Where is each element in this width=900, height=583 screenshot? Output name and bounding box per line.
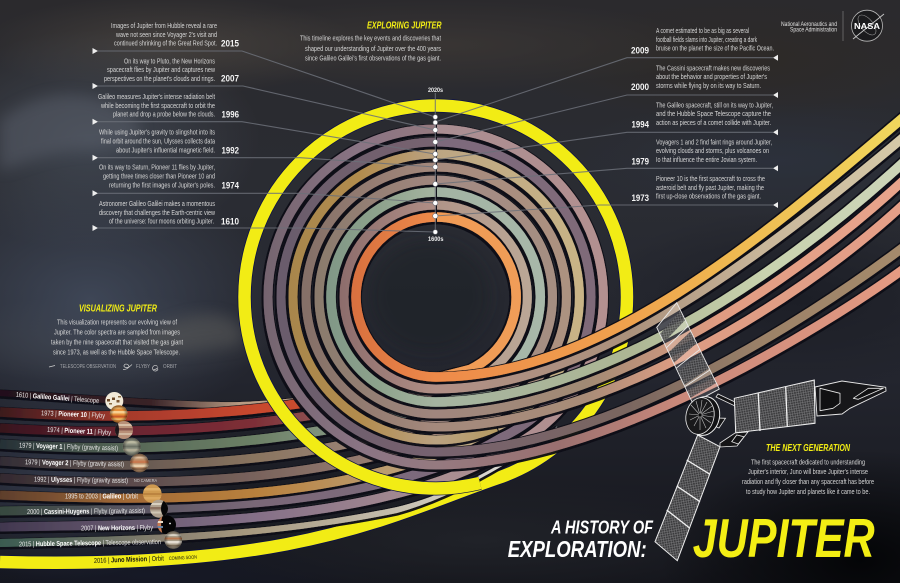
heading: Visualizing Jupiter: VISUALIZING JUPITER (79, 304, 158, 314)
arrowheads: left timeline markers (92, 48, 98, 231)
event 1973: asteroid belt and fly past Jupiter, making the (656, 183, 764, 192)
event 1973: 1973 (632, 193, 649, 204)
event 2007 (104, 56, 239, 84)
event 2000: The Cassini spacecraft makes new discoveries (656, 64, 770, 72)
intro text: Visualizing Jupiter: Jupiter. The color spectra are sampled from images (54, 327, 180, 336)
event 1992: While using Jupiter's gravity to slingshot into its (99, 128, 215, 136)
timeline connector lines (98, 51, 773, 233)
solar array: lower (655, 435, 720, 561)
event 1996: Galileo measures Jupiter's intense radiation belt (98, 92, 215, 101)
mission labels on the ribbons: 1979 | Voyager 1 | Flyby (gravity assist) (19, 443, 118, 452)
event 1994 (632, 100, 773, 130)
event 2015: 2015 (221, 38, 240, 50)
mission labels on the ribbons: 1973 | Pioneer 10 | Flyby (41, 410, 106, 420)
intro text: Exploring Jupiter (300, 34, 441, 62)
event 1996 (98, 92, 239, 120)
heading: Exploring Jupiter: EXPLORING JUPITER (367, 20, 442, 32)
event 1974: On its way to Saturn, Pioneer 11 flies by Jupiter, (99, 162, 215, 172)
mission labels on the ribbons: 2000 | Cassini-Huygens | Flyby (gravity assist) (27, 508, 145, 516)
divider next to logo (842, 11, 844, 41)
event 1974: 1974 (222, 180, 240, 192)
axis label: 2020s: 2020s (428, 88, 444, 94)
text: The Next Generation (742, 457, 874, 496)
intro text: Visualizing Jupiter (51, 317, 183, 356)
mission labels on the ribbons: 1992 | Ulysses | Flyby (gravity assist) (34, 477, 128, 485)
event 1610: discovery that challenges the Earth-centric view (99, 208, 215, 217)
event 1974: returning the first images of Jupiter's poles. (109, 180, 215, 190)
planet: Pioneer 10 view (109, 405, 129, 423)
event 1610: 1610 (221, 216, 239, 228)
mission labels on the ribbons: NO CAMERA (134, 478, 158, 484)
struts and instrument vault (712, 394, 748, 447)
mission labels on the ribbons (16, 392, 161, 548)
planet: Hubble view (164, 531, 184, 549)
event 2015: Images of Jupiter from Hubble reveal a rare (111, 21, 217, 30)
legend: observation types: FLYBY (136, 364, 150, 370)
event 1992: final orbit around the sun, Ulysses collects data (101, 136, 216, 146)
mission labels on the ribbons: 2015 | Hubble Space Telescope | Telescope observation (19, 539, 161, 548)
ribbons: ring left arcs and exit curves (upper layer) (244, 106, 900, 488)
planet: Voyager 1 view (122, 438, 141, 456)
ribbons: spacecraft tails and right-hand ring arcs (lower layer) (0, 106, 627, 563)
event 2009: football fields slams into Jupiter, creating a dark (656, 35, 757, 44)
event 2009: bruise on the planet the size of the Pacific Ocean. (656, 44, 774, 52)
mission labels on the ribbons: 2007 | New Horizons | Flyby (81, 525, 153, 532)
mission labels on the ribbons: 1610 | Galileo Galilei | Telescope (16, 392, 99, 405)
event 1992: about Jupiter's influential magnetic field. (116, 146, 215, 154)
icon: NASA logo: NASA (854, 21, 880, 31)
event 1610: Astronomer Galileo Galilei makes a momentous (99, 199, 215, 208)
event 1979: Voyagers 1 and 2 find faint rings around Jupiter, (656, 138, 772, 146)
event 1979 (632, 138, 772, 168)
mission label: Juno: COMING SOON (169, 555, 197, 562)
solar array: upper, semi-transparent (657, 303, 719, 403)
legend: observation types: ORBIT (163, 364, 177, 370)
event 1992 (99, 128, 239, 156)
heading: The Next Generation: THE NEXT GENERATION (766, 443, 851, 454)
solar array: right (734, 380, 815, 433)
title: A History of Exploration: Jupiter (508, 507, 875, 569)
event 2007: spacecraft flies by Jupiter and captures new (107, 65, 215, 74)
event 1610 (99, 199, 239, 228)
legend: observation types: TELESCOPE OBSERVATION (60, 364, 116, 370)
title: A History of Exploration: Jupiter: EXPLORATION: (508, 536, 647, 562)
event 2009 (631, 26, 774, 56)
event 1973: first up-close observations of the gas giant. (656, 192, 761, 200)
event 2000: 2000 (631, 82, 649, 93)
event 1979: evolving clouds and storms, plus volcanoes on (656, 146, 769, 155)
intro text: Exploring Jupiter: shaped our understanding of Jupiter over the 400 years (305, 44, 441, 53)
event 1996: while becoming the first spacecraft to orbit the (100, 101, 215, 110)
NASA organisation name (781, 22, 837, 34)
yoke and boom at the right array (815, 381, 886, 416)
icon: NASA logo (852, 10, 884, 41)
title: A History of Exploration: Jupiter: A HISTORY OF (550, 516, 654, 538)
legend: observation types (49, 364, 177, 371)
axis label: 1600s: 1600s (428, 237, 444, 243)
NASA organisation name: Space Administration (790, 28, 837, 34)
event 2009: 2009 (631, 46, 649, 56)
intro text: Visualizing Jupiter: since 1973, as well as the Hubble Space Telescope. (53, 347, 180, 356)
event 2007: perspectives on the planet's clouds and rings. (104, 74, 215, 83)
intro text: Exploring Jupiter: This timeline explores the key events and discoveries that (300, 34, 441, 42)
event 2000: about the behavior and properties of Jupiter's (656, 72, 767, 81)
main dish with radial spokes (682, 394, 723, 438)
mission labels on the ribbons: 1995 to 2003 | Galileo | Orbit (65, 494, 138, 500)
event 1996: planet and drop a probe below the clouds. (113, 110, 215, 118)
timeline dots on the axis (433, 115, 438, 234)
planet: Pioneer 11 view (115, 421, 133, 439)
intro text: Exploring Jupiter: since Galileo Galilei's first observations of the gas giant. (305, 54, 441, 62)
event 2015: continued shrinking of the Great Red Spot. (114, 38, 217, 48)
spacecraft: Juno (655, 303, 886, 561)
event 1994: The Galileo spacecraft, still on its way to Jupiter, (656, 100, 773, 110)
background: Jupiter cloud swirls (0, 95, 490, 352)
event 2000: storms while flying by on its way to Saturn. (656, 81, 761, 90)
event 2015: wave not seen since Voyager 2's visit and (115, 30, 217, 39)
event 1974: getting three times closer than Pioneer 10 and (103, 172, 215, 180)
arrowheads: right timeline markers (773, 55, 778, 208)
event 1992: 1992 (222, 146, 239, 156)
event 2009: A comet estimated to be as big as several (656, 26, 749, 35)
mission label: Juno (94, 555, 197, 565)
mission label: Juno: 2016 | Juno Mission | Orbit (94, 556, 164, 565)
NASA organisation name: National Aeronautics and (781, 22, 837, 28)
mission labels on the ribbons: 1979 | Voyager 2 | Flyby (gravity assist) (25, 459, 124, 468)
planet: New Horizons view (157, 516, 176, 534)
event 1994: action as pieces of a comet collide with Jupiter. (656, 118, 771, 127)
event 2015 (111, 21, 240, 50)
event 1973: Pioneer 10 is the first spacecraft to cross the (656, 174, 765, 183)
event 1973 (632, 174, 765, 204)
planet: Cassini view (150, 500, 168, 518)
planet: Galileo Galilei sketch (105, 392, 124, 410)
event 2007: 2007 (221, 74, 239, 84)
mission labels on the ribbons: 1974 | Pioneer 11 | Flyby (47, 427, 112, 437)
event 1996: 1996 (222, 110, 239, 120)
planet: Galileo view (143, 484, 162, 503)
event 1994: 1994 (632, 120, 650, 130)
planet: Voyager 2 view (130, 454, 149, 472)
event 2007: On its way to Pluto, the New Horizons (124, 56, 215, 66)
event 1610: of the universe: four moons orbiting Jupiter. (109, 216, 214, 226)
event 1994: and the Hubble Space Telescope capture the (656, 109, 771, 118)
intro text: Visualizing Jupiter: This visualization represents our evolving view of (57, 317, 178, 326)
intro text: Visualizing Jupiter: taken by the nine spacecraft that visited the gas giant (51, 337, 183, 346)
event 1979: 1979 (632, 156, 649, 168)
event 1979: Io that influence the entire Jovian system. (656, 155, 757, 164)
event 2000 (631, 64, 770, 93)
event 1974 (99, 162, 240, 192)
